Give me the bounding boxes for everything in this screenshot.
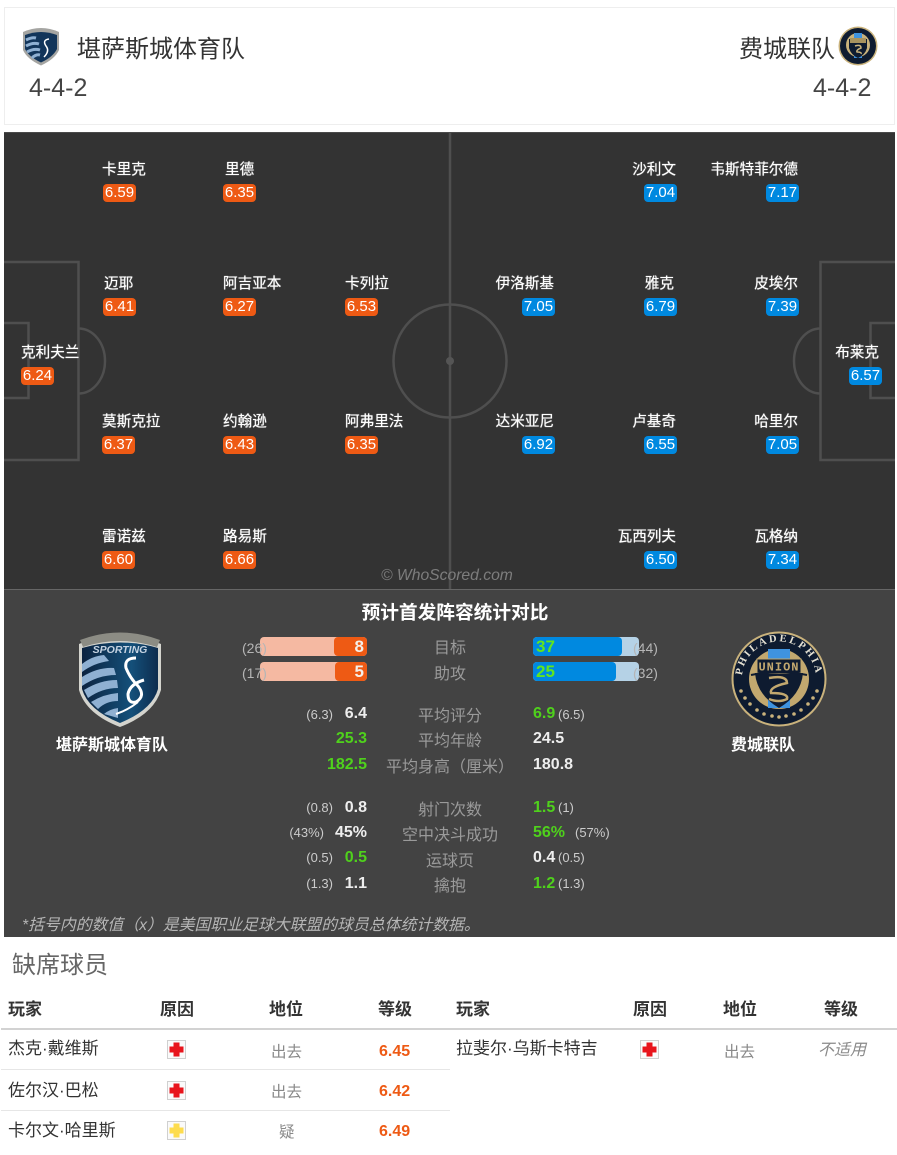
stat labels: 平均年龄 <box>418 733 482 750</box>
icon: Philadelphia Union large crest: UNION <box>758 660 800 674</box>
player: 阿吉亚本: 阿吉亚本 <box>223 276 281 292</box>
row: 佐尔汉·巴松 <box>8 1081 410 1101</box>
player: 皮埃尔 <box>754 274 799 316</box>
player: 伊洛斯基 <box>496 274 555 316</box>
row: 卡尔文·哈里斯: 6.49 <box>379 1123 410 1140</box>
player: 雷诺兹: 雷诺兹 <box>102 529 146 545</box>
missing players heading: 缺席球员 <box>12 952 108 979</box>
away stat values: 1.5 <box>533 799 555 816</box>
column heads: 等级 <box>824 1000 858 1019</box>
away stat values: 24.5 <box>533 730 564 747</box>
player: 路易斯: 6.66 <box>225 551 254 568</box>
row: 杰克·戴维斯: 杰克·戴维斯 <box>8 1039 99 1058</box>
table: away missing players <box>450 1028 897 1030</box>
stat labels: 射门次数 <box>418 802 482 819</box>
player: 雷诺兹 <box>102 528 146 569</box>
player: 雅克: 6.79 <box>646 298 675 315</box>
player: 卡列拉: 6.53 <box>347 298 376 315</box>
home stat values: 0.5 <box>345 849 367 866</box>
row: 拉斐尔·乌斯卡特吉 <box>456 1039 868 1061</box>
away stat values: 180.8 <box>533 756 573 773</box>
player: 布莱克: 布莱克 <box>835 345 879 361</box>
stat labels <box>386 639 514 895</box>
player: 伊洛斯基: 7.05 <box>524 298 553 315</box>
player: 皮埃尔: 7.39 <box>768 298 797 315</box>
icon: Philadelphia Union large crest: PHILADELPHIA <box>735 634 822 676</box>
player: 韦斯特菲尔德 <box>710 160 799 202</box>
home team name: 堪萨斯城体育队 <box>77 36 245 63</box>
player: 路易斯: 路易斯 <box>223 529 267 545</box>
home formation: 4-4-2 <box>29 74 87 102</box>
player: 卡里克: 卡里克 <box>102 162 146 178</box>
player: 里德: 里德 <box>225 162 254 178</box>
icon: Sporting Kansas City large crest: SPORTING <box>93 644 147 656</box>
away stat values <box>533 705 610 892</box>
row: 拉斐尔·乌斯卡特吉: 不适用 <box>818 1042 866 1059</box>
icon: Philadelphia Union large crest <box>732 632 826 726</box>
away stat values: 0.4 <box>533 849 555 866</box>
icon: Sporting Kansas City small crest <box>23 28 59 66</box>
player: 雅克 <box>644 275 677 316</box>
row: 拉斐尔·乌斯卡特吉: 拉斐尔·乌斯卡特吉 <box>456 1039 598 1058</box>
player: 哈里尔: 哈里尔 <box>754 414 798 430</box>
away team label: 费城联队 <box>731 737 795 754</box>
away stat values: (1.3) <box>558 876 585 891</box>
row: 拉斐尔·乌斯卡特吉: 出去 <box>724 1044 755 1061</box>
assists home bar <box>260 662 367 681</box>
player: 里德: 6.35 <box>225 184 254 201</box>
assists away season value: (32) <box>633 665 658 681</box>
player: 莫斯克拉 <box>102 412 160 454</box>
home stat values: 182.5 <box>327 756 367 773</box>
row: 佐尔汉·巴松: 出去 <box>271 1084 302 1101</box>
player: 迈耶: 6.41 <box>105 298 134 315</box>
row: 杰克·戴维斯 <box>8 1039 410 1061</box>
player: 哈里尔 <box>754 413 799 454</box>
player: 莫斯克拉: 莫斯克拉 <box>102 414 160 430</box>
player: 约翰逊: 约翰逊 <box>223 414 267 430</box>
player: 达米亚尼: 6.92 <box>524 436 553 453</box>
stat labels: 目标 <box>434 640 466 657</box>
player: 里德 <box>223 160 256 202</box>
column heads: 等级 <box>378 1000 412 1019</box>
player: 克利夫兰 <box>21 344 79 385</box>
stat labels: 空中决斗成功 <box>402 827 498 844</box>
player: 沙利文: 沙利文 <box>632 162 676 178</box>
stat labels: 运球页 <box>426 853 474 870</box>
player: 迈耶: 迈耶 <box>104 276 133 292</box>
row: 杰克·戴维斯: 6.45 <box>379 1043 410 1060</box>
home stat values: (0.8) <box>306 800 333 815</box>
column heads: 玩家 <box>8 1000 42 1019</box>
player: 沙利文 <box>632 160 677 202</box>
player: 克利夫兰: 克利夫兰 <box>21 345 79 361</box>
player: 哈里尔: 7.05 <box>768 436 797 453</box>
player: 瓦西列夫 <box>618 528 677 569</box>
home stat values: 25.3 <box>336 730 367 747</box>
player: 达米亚尼 <box>496 412 555 454</box>
player: 韦斯特菲尔德: 韦斯特菲尔德 <box>710 162 798 178</box>
player: 瓦格纳: 瓦格纳 <box>754 529 798 545</box>
row: 佐尔汉·巴松: 6.42 <box>379 1083 410 1100</box>
row: 卡尔文·哈里斯: 卡尔文·哈里斯 <box>8 1121 116 1140</box>
player: 瓦西列夫: 瓦西列夫 <box>618 529 676 545</box>
home stat values: 1.1 <box>345 875 367 892</box>
goals away bar <box>533 637 639 656</box>
player: 阿吉亚本 <box>223 274 282 316</box>
player: 路易斯 <box>223 528 267 569</box>
player: 卡里克: 6.59 <box>105 184 134 201</box>
icon: Philadelphia Union small crest <box>838 26 878 66</box>
goals away season value: (44) <box>633 640 658 656</box>
player: 约翰逊: 6.43 <box>225 436 254 453</box>
away team name: 费城联队 <box>739 36 835 63</box>
home team label: 堪萨斯城体育队 <box>56 737 168 754</box>
player: 迈耶 <box>103 276 136 316</box>
goals home season value: (26) <box>242 640 267 656</box>
column heads <box>8 1000 858 1019</box>
row: 杰克·戴维斯: 出去 <box>271 1044 302 1061</box>
stat labels: 平均身高（厘米） <box>386 759 514 776</box>
player: 卢基奇 <box>632 412 677 454</box>
home stat values: (0.5) <box>306 850 333 865</box>
player: 布莱克: 6.57 <box>851 367 880 384</box>
player: 阿弗里法: 6.35 <box>347 436 376 453</box>
assists home bar: 5 <box>355 662 364 681</box>
column heads: 原因 <box>160 1000 194 1019</box>
column heads: 原因 <box>633 1000 667 1019</box>
player: 韦斯特菲尔德: 7.17 <box>768 184 797 201</box>
header panel <box>4 7 895 125</box>
comparison title: 预计首发阵容统计对比 <box>362 602 548 623</box>
row: 佐尔汉·巴松: 佐尔汉·巴松 <box>8 1081 99 1100</box>
icon: Sporting Kansas City large crest <box>79 632 161 727</box>
player: 约翰逊 <box>223 412 267 454</box>
player: 卡里克 <box>102 160 146 202</box>
column heads: 玩家 <box>456 1000 490 1019</box>
player: 达米亚尼: 达米亚尼 <box>496 414 554 430</box>
away stat values: (6.5) <box>558 707 585 722</box>
goals home bar: 8 <box>355 637 364 656</box>
player: 卡列拉: 卡列拉 <box>345 276 389 292</box>
player: 雷诺兹: 6.60 <box>104 551 133 568</box>
away stat values: (0.5) <box>558 850 585 865</box>
footnote: *括号内的数值（x）是美国职业足球大联盟的球员总体统计数据。 <box>22 917 480 934</box>
watermark: © WhoScored.com <box>381 567 513 584</box>
column heads: 地位 <box>723 1000 757 1019</box>
away stat values: (57%) <box>575 825 610 840</box>
player: 阿弗里法 <box>345 412 403 454</box>
player: 皮埃尔: 皮埃尔 <box>754 276 798 292</box>
home stat values: (1.3) <box>306 876 333 891</box>
home stat values: (43%) <box>289 825 324 840</box>
player: 瓦西列夫: 6.50 <box>646 551 675 568</box>
player: 莫斯克拉: 6.37 <box>104 436 133 453</box>
player: 布莱克 <box>835 344 882 385</box>
stat labels: 助攻 <box>434 666 466 683</box>
row: 卡尔文·哈里斯 <box>8 1121 410 1141</box>
player: 瓦格纳: 7.34 <box>768 551 797 568</box>
comparison panel <box>4 589 895 937</box>
away stat values: 56% <box>533 824 565 841</box>
player: 瓦格纳 <box>754 528 799 569</box>
column heads: 地位 <box>269 1000 303 1019</box>
home stat values <box>289 705 367 892</box>
player: 卢基奇: 6.55 <box>646 436 675 453</box>
home stat values: 45% <box>335 824 367 841</box>
goals home bar <box>260 637 367 656</box>
away stat values: (1) <box>558 800 574 815</box>
player: 卡列拉 <box>345 274 389 316</box>
home stat values: 0.8 <box>345 799 367 816</box>
stat labels: 平均评分 <box>418 708 482 725</box>
player: 沙利文: 7.04 <box>646 184 675 201</box>
table: home missing players <box>1 1028 450 1111</box>
player: 伊洛斯基: 伊洛斯基 <box>496 276 554 292</box>
assists away bar <box>533 662 639 681</box>
assists away bar: 25 <box>536 662 555 681</box>
away stat values: 6.9 <box>533 705 555 722</box>
home stat values: (6.3) <box>306 707 333 722</box>
assists home season value: (17) <box>242 665 267 681</box>
player: 雅克: 雅克 <box>645 276 674 292</box>
row: 卡尔文·哈里斯: 疑 <box>279 1124 295 1141</box>
away stat values: 1.2 <box>533 875 555 892</box>
away formation: 4-4-2 <box>813 74 871 102</box>
stat labels: 擒抱 <box>434 878 466 895</box>
formation pitch <box>4 132 895 589</box>
player: 卢基奇: 卢基奇 <box>632 414 676 430</box>
player: 阿吉亚本: 6.27 <box>225 298 254 315</box>
player: 克利夫兰: 6.24 <box>23 367 52 384</box>
goals away bar: 37 <box>536 637 555 656</box>
player: 阿弗里法: 阿弗里法 <box>345 414 403 430</box>
home stat values: 6.4 <box>345 705 367 722</box>
